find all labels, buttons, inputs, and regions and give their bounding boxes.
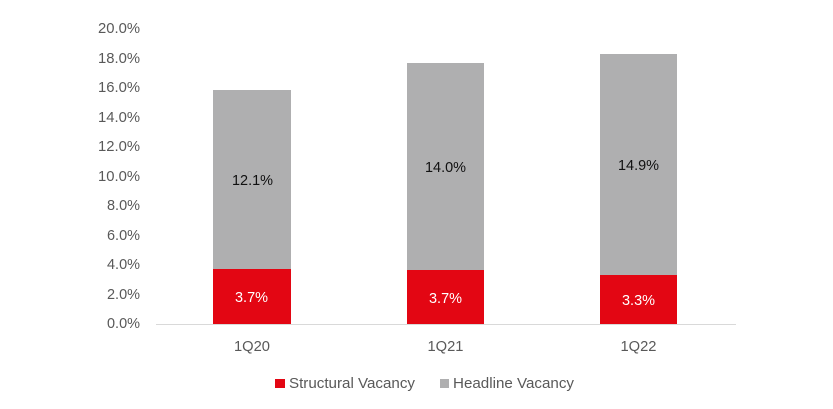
bar: 1Q22: 14.9%	[618, 157, 659, 174]
bar: 1Q20: 3.7%	[235, 289, 268, 306]
x-axis labels: 1Q21	[428, 338, 464, 355]
bar: 1Q22	[600, 54, 677, 324]
y-axis labels	[98, 20, 140, 332]
y-axis labels: 12.0%	[98, 138, 140, 155]
x-axis labels: 1Q22	[620, 338, 656, 355]
x-axis labels	[234, 338, 656, 355]
y-axis labels: 10.0%	[98, 168, 140, 185]
y-axis labels: 2.0%	[107, 286, 140, 303]
y-axis labels: 16.0%	[98, 79, 140, 96]
bar: 1Q21: 3.7%	[429, 290, 462, 307]
y-axis labels: 18.0%	[98, 50, 140, 67]
x-axis labels: 1Q20	[234, 338, 270, 355]
bar: 1Q20: 12.1%	[232, 172, 273, 189]
y-axis labels: 20.0%	[98, 20, 140, 37]
y-axis labels: 8.0%	[107, 197, 140, 214]
legend: Structural Vacancy	[289, 375, 415, 392]
legend: Headline Vacancy	[453, 375, 575, 392]
y-axis labels: 6.0%	[107, 227, 140, 244]
y-axis labels: 14.0%	[98, 109, 140, 126]
bar: 1Q20	[213, 90, 291, 324]
bar: 1Q21: 14.0%	[425, 159, 466, 176]
y-axis labels: 4.0%	[107, 256, 140, 273]
y-axis labels: 0.0%	[107, 315, 140, 332]
legend	[275, 375, 575, 392]
bar: 1Q21	[407, 63, 484, 324]
bar: 1Q22: 3.3%	[622, 292, 655, 309]
